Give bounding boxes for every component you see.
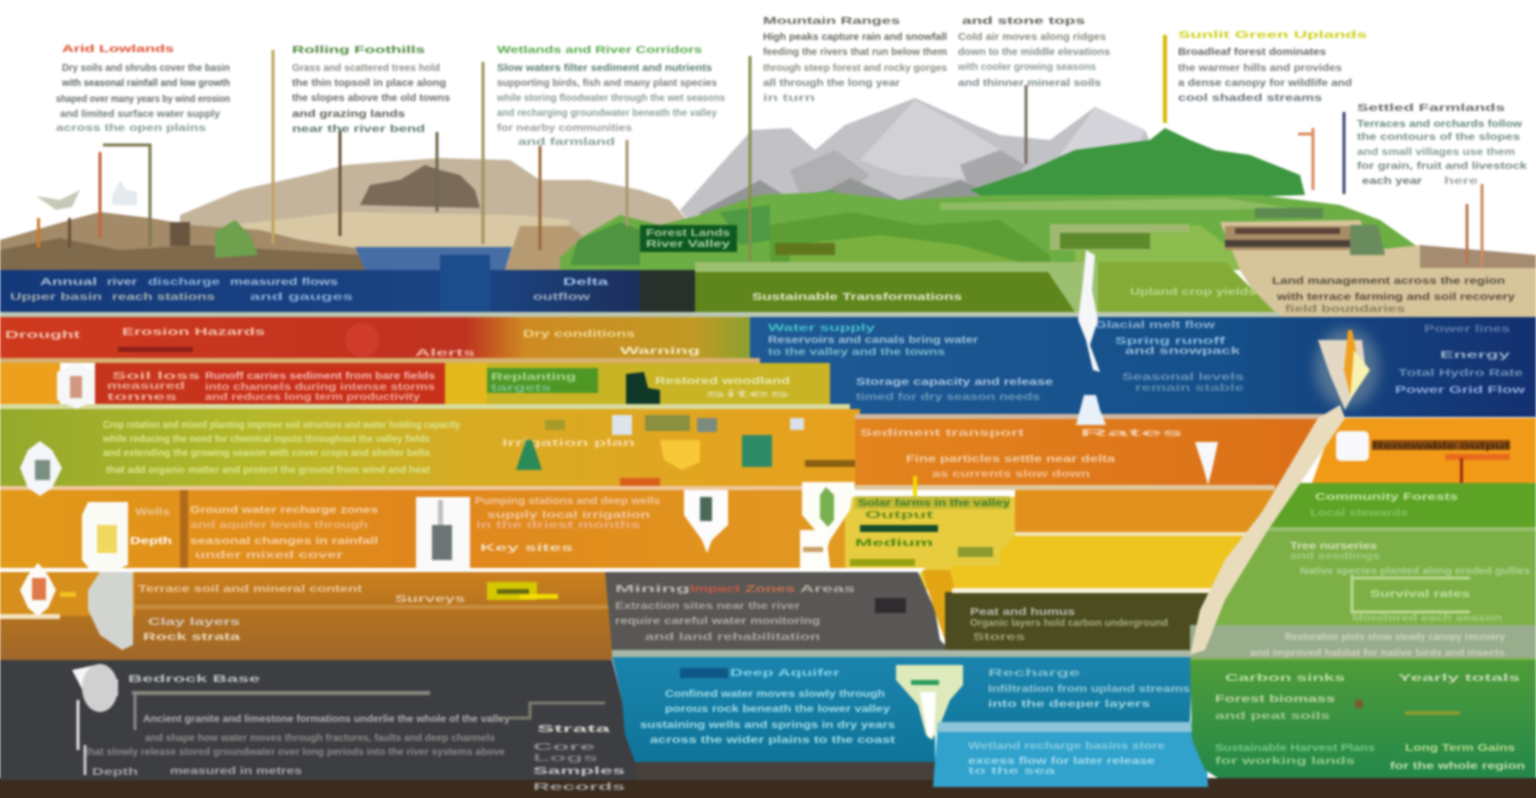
panel: top right green: Community Forests (1315, 492, 1459, 503)
text block: panel 7: Terraces and orchards follow (1357, 119, 1522, 130)
panel: lower right green: and peat soils (1215, 711, 1331, 722)
icon: downward arrow marker (896, 665, 963, 740)
panel: light blue block: excess flow for later release (968, 756, 1156, 767)
panel: orange row: supply local irrigation (487, 510, 650, 521)
left brown foreground (0, 212, 365, 270)
panel: navy band: river (107, 277, 137, 288)
text block: panel 3: and recharging groundwater beneath the valley (497, 108, 717, 119)
panel: navy band: Annual (40, 277, 97, 288)
panel: yellow block (845, 476, 1250, 590)
panel: right orange band: Renewable output (1372, 441, 1511, 452)
panel: orange upper right band: as currents slow down (932, 469, 1090, 480)
panel: red band: Alerts (415, 348, 476, 359)
panel: olive row (0, 409, 860, 487)
yellow tag (487, 582, 558, 600)
panel: lower right green: for working lands (1215, 756, 1356, 767)
panel: dark band: Logs (533, 753, 599, 764)
panel: dark band: Core (533, 742, 596, 753)
panel: dark olive row (945, 588, 1232, 651)
panel: red band: Warning (620, 346, 700, 357)
panel: light blue block: to the sea (968, 766, 1056, 777)
separators (0, 358, 760, 363)
panel: dark olive row: Organic layers hold carbon underground (970, 618, 1168, 629)
text block: panel 5: down to the middle elevations (958, 47, 1110, 58)
heading: and stone tops (962, 16, 1086, 27)
text block: panel 2: the thin topsoil in place along (292, 78, 446, 89)
panel: dark column (640, 270, 695, 312)
panel: yellow orange row: tonnes (107, 392, 178, 403)
text block: panel 5: and thinner mineral soils (958, 78, 1102, 89)
panel: orange row: and aquifer levels through (190, 520, 368, 531)
panel: tan band text: with terrace farming and soil recovery (1276, 292, 1516, 303)
panel: dark band: Strata (537, 724, 611, 735)
text block: panel 3: Slow waters filter sediment and nutrients (497, 63, 712, 74)
panel: blue band: remain stable (1135, 383, 1245, 394)
panel: mid right green: Tree nurseries (1290, 541, 1378, 552)
text block: panel 2: Grass and scattered trees hold (292, 63, 440, 74)
icon: map pin (684, 490, 728, 553)
panel: mid right green (1190, 527, 1536, 660)
text block: panel 7: each year (1362, 176, 1422, 187)
green ground (560, 192, 1425, 314)
panel: brown row (0, 572, 612, 660)
callout sign: green (640, 225, 737, 252)
text block: panel 3: for nearby communities (497, 123, 633, 134)
panel: blue band: Total Hydro Rate (1398, 368, 1524, 379)
panel: dark band: Records (533, 782, 626, 793)
separators (612, 650, 1202, 657)
panel: orange row: Wells (135, 507, 171, 518)
panel: lower right green: Yearly totals (1398, 673, 1521, 684)
text block: panel 4: through steep forest and rocky gorges (763, 63, 947, 74)
icon: house (112, 180, 137, 205)
panel: orange row: seasonal changes in rainfall (190, 536, 378, 547)
panel: mid right green: and seedlings (1290, 551, 1381, 562)
panel: orange upper right band: Rates (1080, 428, 1185, 439)
panel: light green band (1098, 262, 1275, 312)
text block: panel 5 (957, 16, 1110, 89)
panel: yellow orange row: Restored woodland (655, 376, 790, 387)
text block: panel 7: the contours of the slopes (1357, 132, 1521, 143)
panel: blue band: Glacial melt flow (1095, 320, 1215, 331)
panel: blue band: to the valley and the towns (768, 347, 946, 358)
panel: dark band: Depth (92, 767, 138, 778)
panel: navy band: Delta (563, 277, 609, 288)
right bank (505, 226, 640, 270)
text block: panel 6 (1178, 30, 1368, 104)
panel: dark band: that slowly release stored groundwater over long periods into the river systems above (85, 747, 505, 758)
panel: blue band (750, 317, 1536, 417)
panel: orange row: Depth (130, 536, 172, 547)
panel: blue band: Power lines (1424, 324, 1511, 335)
text block: panel 2: near the river bend (292, 124, 425, 135)
icon: dark block (626, 372, 660, 404)
separators (0, 312, 1280, 317)
text block: panel 5: with cooler growing seasons (957, 62, 1096, 73)
panel: top right green (1265, 483, 1536, 530)
panel: light green band: Upland crop yields (1130, 287, 1257, 298)
text block: panel 6: cool shaded streams (1178, 93, 1323, 104)
panel: teal band: Recharge (988, 668, 1081, 679)
panel: mid right green: Survival rates (1370, 589, 1471, 600)
panel: orange row: Pumping stations and deep wells (475, 496, 661, 507)
panel: red band (0, 317, 750, 359)
panel: dark band: and shape how water moves through fractures, faults and deep channels (145, 733, 495, 744)
panel: yellow orange row: and reduces long term productivity (205, 392, 421, 403)
icon: shield 2 (20, 441, 62, 496)
panel: blue band: Seasonal levels (1122, 372, 1245, 383)
panel: orange row (0, 490, 850, 570)
icon: white bottle on blue (1076, 395, 1106, 425)
panel: dark band (0, 660, 635, 793)
panel: yellow orange row: Runoff carries sediment from bare fields (205, 371, 436, 382)
panel: orange row: in the driest months (476, 520, 641, 531)
icon: tower tile (416, 497, 470, 570)
panel: orange right stripe (1015, 490, 1290, 536)
panel: dark band: Ancient granite and limestone formations underlie the whole of the valley (143, 714, 510, 725)
panel: blue band: Power Grid Flow (1395, 385, 1525, 396)
panel: tan band text: Land management across the region (1272, 276, 1505, 287)
panel: orange upper right band: Sediment transport (860, 428, 1025, 439)
panel: grey row: and land rehabilitation (645, 632, 820, 643)
text block: panel 6: a dense canopy for wildlife and (1178, 78, 1352, 89)
panel: navy band: reach stations (112, 292, 216, 303)
icon: bird (36, 190, 80, 210)
white divider (0, 568, 925, 572)
panel: yellow orange row: Soil loss (112, 371, 201, 382)
panel: yellow block: Solar farms in the valley (858, 498, 1011, 509)
panel: lower right green: Forest biomass (1215, 694, 1336, 705)
icon: bottle marker (800, 530, 830, 570)
panel: orange row: Key sites (480, 543, 574, 554)
panel: teal band: Infiltration from upland streams (988, 684, 1191, 695)
text block: panel 1: across the open plains (56, 123, 207, 134)
icon: shield 4 (20, 563, 56, 616)
panel: dark olive row: Peat and humus (970, 607, 1076, 618)
text block: panel 4 (763, 16, 947, 104)
text block: panel 4: feeding the rivers that run below them (763, 47, 947, 58)
panel: red band: Erosion Hazards (122, 327, 266, 338)
text block: panel 6: the warmer hills and provides (1178, 63, 1343, 74)
heading: Rolling Foothills (292, 45, 426, 56)
icon: green leaf marker (802, 482, 855, 555)
text block: panel 2 (292, 45, 450, 135)
panel: lower right green: Long Term Gains (1405, 743, 1516, 754)
landscape: terrain illustration (0, 98, 1536, 320)
right tan slope (1220, 220, 1536, 320)
text block: panel 6: Broadleaf forest dominates (1178, 47, 1326, 58)
panel: dark band: Bedrock Base (128, 674, 261, 685)
panel: yellow block: Medium (855, 538, 933, 549)
yellow wedge (922, 570, 958, 640)
panel: teal band: into the deeper layers (988, 699, 1151, 710)
panel: yellow orange row: sites (705, 389, 792, 400)
text block: panel 4: High peaks capture rain and snowfall (763, 32, 947, 43)
text block: panel 3: while storing floodwater through the wet seasons (496, 93, 725, 104)
icon: white box (1336, 431, 1369, 461)
panel: brown row: Terrace soil and mineral content (138, 584, 363, 595)
soil strip under teal band (625, 762, 945, 780)
callout: green box: targets (491, 383, 552, 394)
panel: blue band: and snowpack (1125, 346, 1241, 357)
panel: tan band text (1272, 276, 1516, 315)
panel: brown row: Clay layers (148, 617, 241, 628)
panel: orange upper right band (855, 414, 1335, 490)
text block: panel 4: in turn (763, 93, 815, 104)
panel: brown row: Surveys (395, 594, 466, 605)
panel: mid right green: Native species planted along eroded gullies (1300, 566, 1530, 577)
panel: blue band: timed for dry season needs (856, 392, 1041, 403)
text block: panel 1: with seasonal rainfall and low growth (61, 78, 230, 89)
panel: olive row: Crop rotation and mixed planting improve soil structure and water holding capacity (103, 420, 460, 431)
panel: navy band (0, 255, 640, 312)
panel: teal band: porous rock beneath the lower valley (665, 704, 891, 715)
river (355, 247, 512, 270)
mountains (680, 98, 1180, 235)
panel: dark band: measured in metres (170, 766, 303, 777)
panel: olive band: Sustainable Transformations (752, 292, 963, 303)
heading: Wetlands and River Corridors (497, 45, 703, 56)
panel: red band: Drought (5, 330, 81, 341)
icon: grey shield (88, 572, 133, 650)
panel: yellow orange row (0, 363, 830, 404)
panel: grey row: Zones (745, 584, 796, 595)
panel: red band: Dry conditions (523, 329, 636, 340)
panel: olive row: that add organic matter and protect the ground from wind and heat (106, 465, 431, 476)
heading: Arid Lowlands (62, 44, 175, 55)
panel: lower right green (1190, 660, 1536, 778)
text block: panel 1: shaped over many years by wind erosion (56, 94, 230, 105)
panel: olive row: and extending the growing season with cover crops and shelter belts (103, 448, 430, 459)
panel: navy band: Upper basin (10, 292, 102, 303)
panel: olive band (695, 272, 1075, 312)
callout: green box: Replanting (491, 372, 576, 383)
panel: mid right green: Restoration plots show steady canopy recovery (1285, 632, 1505, 643)
text block: panel 1: and limited surface water supply (60, 109, 220, 120)
text block: panel 7: and small villages use them (1357, 147, 1515, 158)
icon: white sliver waterfall (1078, 250, 1100, 372)
panel: lower right green: Carbon sinks (1225, 673, 1346, 684)
panel: teal band: Confined water moves slowly through (665, 689, 885, 700)
panel: orange row: under mixed cover (195, 550, 343, 561)
text block: panel 3: supporting birds, fish and many plant species (497, 78, 717, 89)
text block: panel 2: the slopes above the old towns (292, 93, 450, 104)
panel: yellow orange row: measured (107, 381, 185, 392)
panel: grey row: Impact (690, 584, 741, 595)
panel: orange upper right band: Fine particles settle near delta (906, 454, 1116, 465)
text block: panel 7: for grain, fruit and livestock (1357, 161, 1528, 172)
panel: navy band: discharge (148, 277, 221, 288)
text block: panel 4: all through the long year (763, 78, 900, 89)
panel: grey row: Areas (800, 584, 856, 595)
panel: blue band: Water supply (768, 323, 876, 334)
panel: top right green: Local stewards (1310, 508, 1409, 519)
callout sign: green: River Valley (646, 239, 731, 250)
panel: olive row: Irrigation plan (502, 438, 635, 449)
bottom soil (0, 778, 1536, 798)
text block: panel 1 (56, 44, 230, 134)
panel: navy band: and gauges (250, 292, 354, 303)
icon: pin on orange (1195, 442, 1218, 485)
icon: glowing lamp (1315, 328, 1379, 410)
text block: panel 3 (496, 45, 725, 148)
panel: grey row: Extraction sites near the river (615, 601, 800, 612)
panel: grey row: require careful water monitoring (615, 616, 820, 627)
panel: teal band: across the wider plains to the coast (650, 735, 896, 746)
panel: light blue block (933, 722, 1208, 787)
panel: navy band: outflow (533, 292, 590, 303)
panel: tan band text: field boundaries (1285, 304, 1406, 315)
callout: green box (487, 368, 598, 394)
text block: panel 7 (1357, 103, 1528, 187)
panel: orange row: Ground water recharge zones (190, 505, 379, 516)
panel: blue band: Storage capacity and release (856, 377, 1054, 388)
text block: panel 5: Cold air moves along ridges (958, 32, 1106, 43)
green hill (970, 128, 1305, 205)
panel: dark olive row: Stores (973, 632, 1026, 643)
panel: teal band: Deep Aquifer (730, 668, 840, 679)
panel: mid right green: and improved habitat for native birds and insects (1250, 648, 1505, 659)
panel: grey row (605, 572, 950, 650)
panel: right orange band (1312, 418, 1536, 483)
panel: light blue block: Wetland recharge basins store (968, 741, 1166, 752)
panel: blue band: Reservoirs and canals bring water (768, 335, 978, 346)
heading: Sunlit Green Uplands (1178, 30, 1368, 41)
panel: grey row: Mining (615, 584, 690, 595)
left tan hills (180, 158, 700, 260)
icon: shield 3 (82, 502, 128, 572)
panel: mid right green: Monitored each season (1352, 613, 1502, 624)
panel: lower right green: for the whole region (1390, 761, 1525, 772)
panel: yellow block: Output (865, 510, 934, 521)
separators (0, 404, 850, 409)
panel: yellow orange row: into channels during intense storms (205, 382, 436, 393)
heading: Settled Farmlands (1357, 103, 1506, 114)
text block: panel 2: and grazing lands (292, 109, 406, 120)
panel: teal band (612, 657, 1192, 762)
text block: panel 1: Dry soils and shrubs cover the basin (62, 63, 230, 74)
panel: blue band: Energy (1440, 350, 1511, 361)
panel: blue band: Spring runoff (1115, 336, 1226, 347)
icon: bulb marker (72, 664, 118, 775)
panel: brown row: Rock strata (143, 632, 241, 643)
panel: teal band: sustaining wells and springs in dry years (640, 720, 896, 731)
leader poles (100, 35, 1482, 268)
diagonal cream road (1190, 405, 1345, 655)
icon: shield 1 (57, 363, 95, 409)
text block: panel 3: and farmland (518, 137, 615, 148)
panel: navy band: measured flows (230, 277, 339, 288)
heading: Mountain Ranges (763, 16, 901, 27)
separators (0, 486, 830, 491)
panel: lower right green: Sustainable Harvest Plans (1215, 743, 1376, 754)
panel: dark band: Samples (533, 766, 626, 777)
panel: olive row: while reducing the need for chemical inputs throughout the valley fields (102, 434, 430, 445)
text block: panel 7: here (1444, 176, 1479, 187)
callout sign: green: Forest Lands (646, 228, 731, 239)
